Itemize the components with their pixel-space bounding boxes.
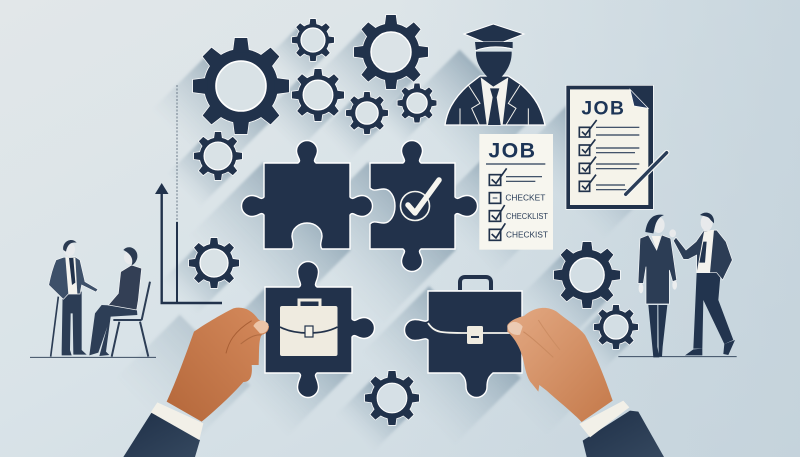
left hand holding piece xyxy=(123,308,269,457)
rows: CHECKLIST xyxy=(506,212,548,221)
icon: gear right large xyxy=(554,242,620,308)
icon: gear left lower xyxy=(189,238,239,288)
puzzle piece: white briefcase xyxy=(265,262,375,398)
heading: JOB xyxy=(488,138,535,162)
rows: CHECKET xyxy=(505,194,545,203)
pen xyxy=(626,153,667,194)
icon: large gear xyxy=(193,38,289,134)
sleeve left xyxy=(123,412,200,457)
rows: CHECKIST xyxy=(506,230,548,239)
document: job checklist with pen xyxy=(566,85,667,209)
shirt and tie xyxy=(481,77,508,125)
icon: gear middle xyxy=(292,69,344,121)
sleeve right xyxy=(583,411,664,457)
puzzle piece: checkmark xyxy=(370,140,478,272)
standing man xyxy=(669,213,735,355)
people: seated conversation xyxy=(30,240,156,357)
seated woman and chair xyxy=(89,247,150,357)
hand right xyxy=(507,308,613,422)
ground line xyxy=(30,356,156,359)
growth chart xyxy=(155,85,222,303)
puzzle piece: blank xyxy=(242,140,373,249)
puzzle piece: dark briefcase xyxy=(405,277,522,398)
head silhouette xyxy=(476,52,512,83)
paper xyxy=(570,89,648,205)
jacket xyxy=(445,76,545,125)
heading: JOB xyxy=(581,98,624,119)
gears cluster xyxy=(193,15,436,180)
right hand holding piece xyxy=(507,308,664,457)
icon: gear bottom xyxy=(365,371,419,425)
hand left xyxy=(167,308,269,422)
standing man xyxy=(49,240,98,357)
icon: gear left upper xyxy=(194,132,242,180)
card: job checklist xyxy=(479,134,553,250)
people: standing conversation xyxy=(618,213,737,357)
icon: gear top small xyxy=(292,19,334,61)
rows xyxy=(489,168,548,240)
icon: gear right small xyxy=(594,305,638,349)
checklist rows xyxy=(579,120,639,191)
icon: gear small right xyxy=(398,84,436,122)
icon: gear top right xyxy=(354,15,428,89)
cuff left xyxy=(151,402,203,440)
person: graduate cap figure xyxy=(445,24,545,125)
ground line xyxy=(618,355,737,358)
cap xyxy=(464,24,524,42)
icon: gear small centre xyxy=(346,92,388,134)
backing board xyxy=(566,85,653,209)
standing woman xyxy=(638,215,677,357)
cuff right xyxy=(579,401,629,437)
